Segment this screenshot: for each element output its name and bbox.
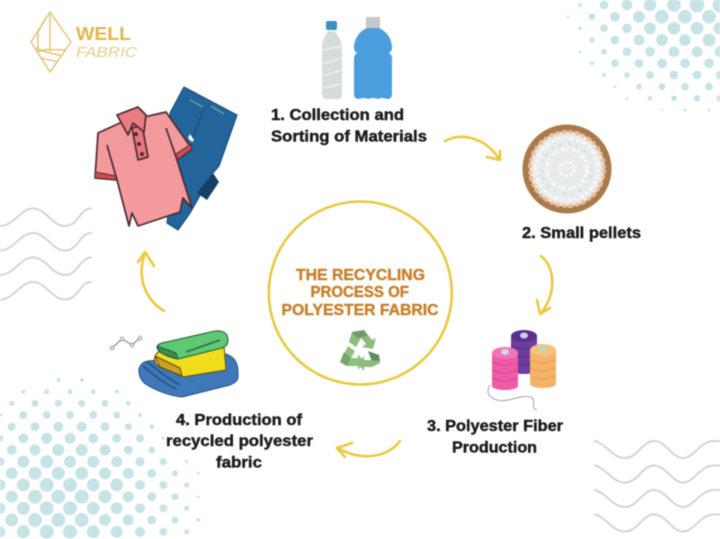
icon: bowl of pellets [522,124,612,214]
wave lines: left [0,208,91,300]
icon: recycle symbol [340,330,380,371]
logo: Well Fabric [31,12,138,72]
label: step 1: Sorting of Materials [271,128,427,146]
arrow: step 2 to 3 [537,256,552,314]
label: step 3 [427,418,563,456]
logo wordmark: FABRIC: FABRIC [76,45,138,61]
icon: small squiggle [110,336,142,350]
label: step 4: recycled polyester [166,433,313,450]
purple spool [511,330,537,374]
arrow: step 3 to 4 [337,441,400,457]
blue fabric [139,354,238,397]
arrow: step 1 to 2 [445,137,500,160]
icon: folded fabric stack [139,331,238,397]
thread [488,385,537,410]
halftone dots: bottom left [0,378,200,538]
label: step 3: 3. Polyester Fiber [427,418,563,435]
icon: recycled clothes (shirt and jeans) [95,87,237,230]
green fabric [157,331,228,359]
yellow fabric [154,346,226,377]
jeans [167,87,237,230]
icon: plastic bottles [322,17,392,99]
logo icon: diamond [31,12,71,72]
shirt [95,107,192,226]
label: step 1 [271,107,427,146]
blue bottle [354,17,392,99]
label: step 4: fabric [216,454,262,472]
label: step 3: Production [452,440,537,456]
pink spool [492,347,518,390]
wave lines: bottom right [595,441,720,532]
label: step 1: 1. Collection and [271,107,404,124]
circle outline [269,202,452,384]
label: step 2: 2. Small pellets [522,225,641,242]
label: step 4: 4. Production of [176,412,303,429]
label: step 4 [166,412,313,472]
title: POLYESTER FABRIC [282,302,438,319]
logo wordmark: WELL: WELL [76,24,131,44]
title: PROCESS OF [310,284,409,301]
title: THE RECYCLING [296,267,425,284]
title [282,267,438,319]
icon: thread spools [488,330,556,410]
white bottle [322,21,342,99]
arrow: step 4 to clothes [138,252,164,311]
center circle with title [269,202,452,384]
orange spool [530,344,556,388]
halftone dots: top right [567,0,720,111]
